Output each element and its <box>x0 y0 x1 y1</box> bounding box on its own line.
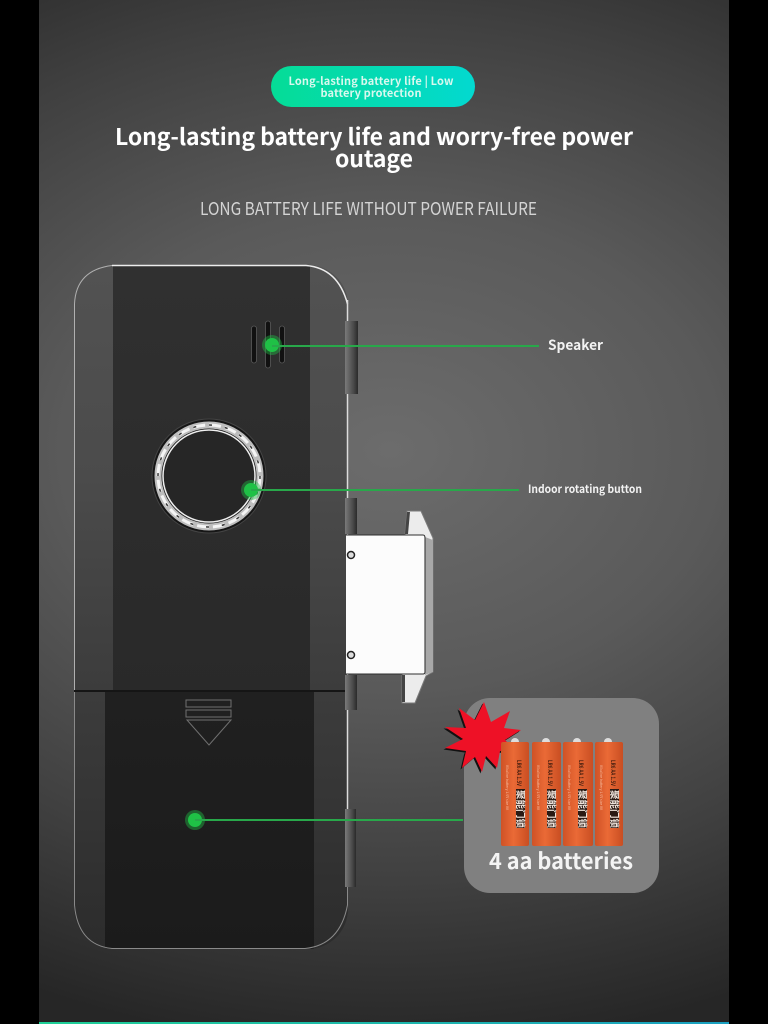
battery 3: Alkaline battery 1.5V size AA <box>566 765 571 811</box>
callout: indoor rotating button <box>241 480 642 500</box>
pill badge: battery protection <box>320 85 422 101</box>
rotating knob <box>152 419 266 533</box>
battery 4 <box>595 738 623 846</box>
hinges <box>345 321 358 887</box>
title <box>115 118 634 174</box>
callout: indoor rotating button: Indoor rotating button <box>528 481 642 497</box>
icon: red starburst <box>444 702 521 774</box>
battery 4: LR6 AA 1.5V <box>609 760 618 786</box>
latch bolt <box>346 511 433 703</box>
battery 2: LR6 AA 1.5V <box>546 760 555 786</box>
battery 3: LR6 AA 1.5V <box>577 760 586 786</box>
subtitle: LONG BATTERY LIFE WITHOUT POWER FAILURE <box>200 195 537 221</box>
battery 3 <box>563 738 593 846</box>
battery 4: 聚能门锁 <box>608 790 622 829</box>
lock body <box>74 265 348 949</box>
pill badge <box>271 66 475 107</box>
battery 2: Alkaline battery 1.5V size AA <box>535 765 540 811</box>
battery 2 <box>532 738 561 846</box>
battery caption: 4 aa batteries <box>489 844 633 876</box>
callout: speaker: Speaker <box>548 335 604 355</box>
panel: batteries <box>444 698 659 893</box>
title: outage <box>335 140 413 174</box>
battery 3: 聚能门锁 <box>576 790 590 829</box>
battery 1: 聚能门锁 <box>514 790 528 829</box>
battery 4: Alkaline battery 1.5V size AA <box>598 765 603 811</box>
battery cover arrow mark <box>186 700 231 745</box>
speaker slots <box>252 321 284 368</box>
pill badge: Long-lasting battery life | Low <box>288 73 454 89</box>
battery 1: LR6 AA 1.5V <box>515 760 524 786</box>
title: Long-lasting battery life and worry-free power <box>115 118 634 152</box>
bottom teal strip <box>39 1022 729 1024</box>
battery 1: Alkaline battery 1.5V size AA <box>504 765 509 811</box>
battery 1 <box>501 738 529 846</box>
door lock product <box>74 265 433 949</box>
callout: battery compartment <box>185 810 463 830</box>
callout: speaker <box>262 335 604 355</box>
battery 2: 聚能门锁 <box>545 790 559 829</box>
